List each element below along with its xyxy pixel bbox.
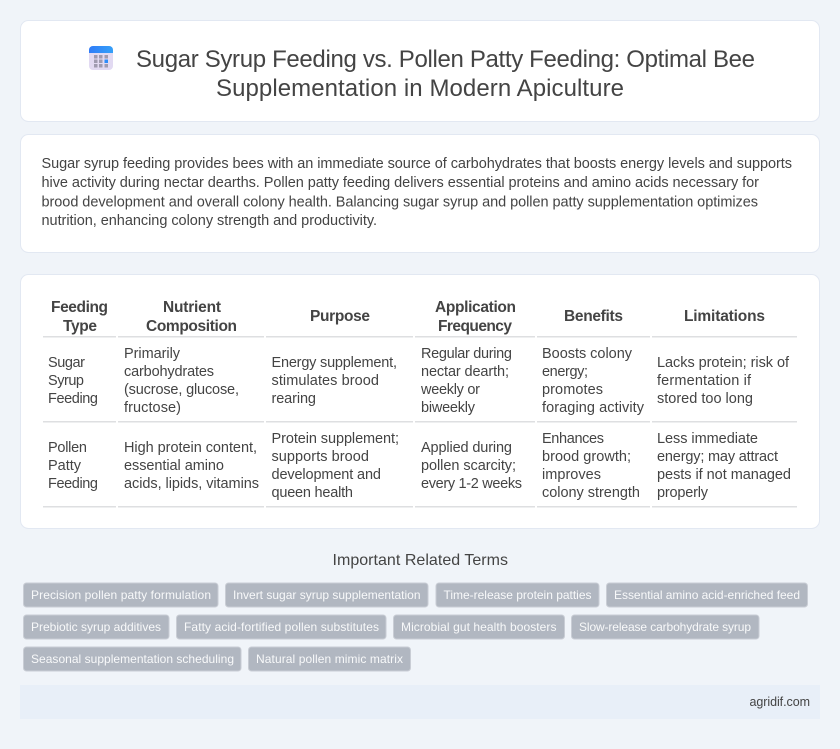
table row: sugar syrup feeding: (sucrose, glucose, bbox=[124, 382, 239, 398]
table row: pollen patty feeding: development and bbox=[272, 467, 381, 483]
table row: sugar syrup feeding: fermentation if bbox=[657, 373, 752, 389]
tag list: related terms: Prebiotic syrup additives bbox=[31, 620, 161, 634]
table row: sugar syrup feeding: energy; bbox=[542, 364, 588, 380]
table header row: Composition bbox=[146, 318, 237, 335]
table row: pollen patty feeding: colony strength bbox=[542, 485, 640, 501]
table row: pollen patty feeding: essential amino bbox=[124, 458, 224, 474]
table row: pollen patty feeding: every 1-2 weeks bbox=[421, 476, 522, 492]
heading: important related terms: Important Related Terms bbox=[332, 552, 508, 569]
table row: pollen patty feeding: Patty bbox=[48, 458, 82, 474]
footer bar: agridif.com bbox=[750, 695, 810, 709]
table row: sugar syrup feeding: carbohydrates bbox=[124, 364, 214, 380]
table header row: Frequency bbox=[438, 318, 512, 335]
table header row: Purpose bbox=[310, 308, 370, 325]
tag list: related terms: Time-release protein patties bbox=[444, 588, 592, 602]
table row: sugar syrup feeding: Syrup bbox=[48, 373, 84, 389]
table row: pollen patty feeding: Enhances bbox=[542, 431, 604, 447]
table row: pollen patty feeding: Pollen bbox=[48, 440, 87, 456]
table row: pollen patty feeding bbox=[48, 431, 791, 501]
table row: sugar syrup feeding: rearing bbox=[272, 391, 316, 407]
table row: sugar syrup feeding bbox=[48, 346, 790, 416]
title: Sugar Syrup Feeding vs. Pollen Patty Feeding: Optimal Bee bbox=[136, 46, 755, 73]
table row: pollen patty feeding: Feeding bbox=[48, 476, 98, 492]
table row: pollen patty feeding: properly bbox=[657, 485, 709, 501]
table row: sugar syrup feeding: weekly or bbox=[420, 382, 480, 398]
text block: introduction paragraph: hive activity during nectar dearths. Pollen patty feeding delivers essential proteins and amino acids necessary for bbox=[42, 175, 759, 191]
text block: introduction paragraph bbox=[42, 156, 792, 229]
table row: sugar syrup feeding: Boosts colony bbox=[542, 346, 633, 362]
tag list: related terms bbox=[24, 583, 808, 671]
tag list: related terms: Fatty acid-fortified pollen substitutes bbox=[184, 620, 379, 634]
table row: sugar syrup feeding: Feeding bbox=[48, 391, 98, 407]
table row: pollen patty feeding: High protein content, bbox=[124, 440, 257, 456]
panel: introduction bbox=[20, 134, 820, 252]
tag list: related terms: Microbial gut health boosters bbox=[401, 620, 556, 634]
table row: sugar syrup feeding: promotes bbox=[542, 382, 603, 398]
table row: sugar syrup feeding: biweekly bbox=[421, 400, 476, 416]
icon: calendar bbox=[89, 46, 113, 70]
table row: sugar syrup feeding: Lacks protein; risk of bbox=[657, 355, 790, 371]
footer bar bbox=[20, 685, 820, 719]
panel: header bbox=[20, 20, 820, 122]
table row: sugar syrup feeding: Sugar bbox=[48, 355, 85, 371]
table header row: Application bbox=[435, 299, 516, 316]
table header row: Nutrient bbox=[163, 299, 221, 316]
table row: sugar syrup feeding: foraging activity bbox=[542, 400, 645, 416]
table row: pollen patty feeding: pests if not managed bbox=[657, 467, 791, 483]
table row: pollen patty feeding: Protein supplement; bbox=[272, 431, 399, 447]
table row: sugar syrup feeding: Regular during bbox=[421, 346, 512, 362]
panel: comparison table bbox=[20, 274, 820, 528]
table row: sugar syrup feeding: nectar dearth; bbox=[421, 364, 509, 380]
table row: sugar syrup feeding: Primarily bbox=[124, 346, 181, 362]
tag list: related terms: Natural pollen mimic matrix bbox=[256, 652, 403, 666]
table row: pollen patty feeding: pollen scarcity; bbox=[421, 458, 516, 474]
table header row: Feeding bbox=[51, 299, 108, 316]
table row: pollen patty feeding: Applied during bbox=[421, 440, 512, 456]
table row: sugar syrup feeding: stimulates brood bbox=[272, 373, 379, 389]
table row: sugar syrup feeding: fructose) bbox=[124, 400, 181, 416]
text block: introduction paragraph: nutrition, enhancing colony strength and productivity. bbox=[42, 213, 377, 229]
text block: introduction paragraph: Sugar syrup feeding provides bees with an immediate source of carbohydrates that boosts energy levels and supports bbox=[42, 156, 792, 172]
tag list: related terms: Slow-release carbohydrate syrup bbox=[579, 620, 751, 634]
title: Supplementation in Modern Apiculture bbox=[216, 75, 624, 102]
table row: pollen patty feeding: queen health bbox=[272, 485, 353, 501]
tag list: related terms: Seasonal supplementation scheduling bbox=[31, 652, 234, 666]
table header row bbox=[51, 299, 765, 335]
table row: pollen patty feeding: Less immediate bbox=[657, 431, 758, 447]
table header row: Limitations bbox=[684, 308, 765, 325]
table row: pollen patty feeding: improves bbox=[542, 467, 601, 483]
tag list: related terms: Precision pollen patty formulation bbox=[31, 588, 211, 602]
table row: pollen patty feeding: energy; may attract bbox=[657, 449, 778, 465]
table row: pollen patty feeding: brood growth; bbox=[542, 449, 631, 465]
tag list: related terms: Invert sugar syrup supplementation bbox=[233, 588, 420, 602]
table row: pollen patty feeding: supports brood bbox=[272, 449, 369, 465]
table header row: Type bbox=[63, 318, 97, 335]
tag list: related terms: Essential amino acid-enriched feed bbox=[614, 588, 800, 602]
text block: introduction paragraph: brood development and overall colony health. Balancing sugar syrup and pollen patty supplementation optimizes bbox=[42, 194, 758, 210]
table row: sugar syrup feeding: Energy supplement, bbox=[272, 355, 397, 371]
table header row: Benefits bbox=[564, 308, 623, 325]
table row: sugar syrup feeding: stored too long bbox=[657, 391, 753, 407]
title bbox=[136, 46, 755, 102]
table row: pollen patty feeding: acids, lipids, vitamins bbox=[124, 476, 259, 492]
